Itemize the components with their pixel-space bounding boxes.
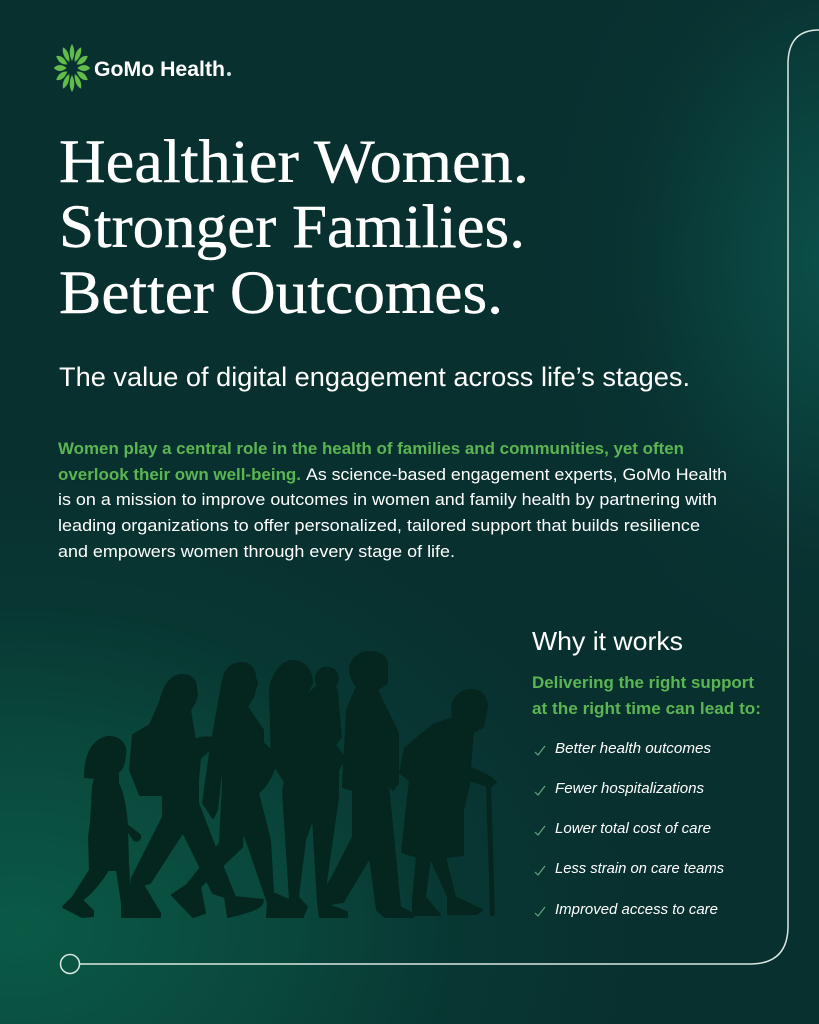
checklist: Better health outcomes [555, 741, 711, 757]
intro paragraph [58, 439, 727, 561]
intro paragraph: leading organizations to offer personalized, tailored support that builds resilience [58, 516, 700, 535]
green lead-in: Delivering the right support [532, 673, 754, 692]
intro paragraph: is on a mission to improve outcomes in women and family health by partnering with [58, 490, 717, 509]
subtitle: The value of digital engagement across life’s stages. [59, 362, 690, 392]
heading: Why it works [532, 626, 683, 656]
title [59, 129, 529, 327]
silhouette: child [63, 737, 160, 917]
intro paragraph: As science-based engagement experts, GoMo Health [306, 465, 727, 484]
silhouette: pregnant woman [172, 663, 305, 917]
checklist: Improved access to care [555, 902, 718, 918]
silhouette: walking cane [487, 783, 494, 915]
logo: GoMo Health [54, 44, 231, 92]
green lead-in [532, 673, 761, 718]
checklist [535, 741, 724, 918]
intro paragraph: and empowers women through every stage of life. [58, 542, 455, 561]
silhouette: elder woman [400, 690, 496, 915]
silhouette: mother holding baby [270, 661, 347, 917]
icon: green leaf burst [54, 44, 90, 92]
intro paragraph: overlook their own well-being. [58, 465, 301, 484]
title: Healthier Women. [59, 129, 529, 196]
title: Better Outcomes. [59, 260, 503, 327]
silhouette: teen with backpack [122, 675, 263, 917]
silhouettes: women across life stages [63, 652, 496, 917]
intro paragraph: Women play a central role in the health of families and communities, yet often [58, 439, 684, 458]
panel: why it works [532, 626, 761, 918]
green lead-in: at the right time can lead to: [532, 699, 761, 718]
title: Stronger Families. [59, 194, 525, 261]
silhouette: adult woman [318, 652, 413, 917]
logo wordmark: GoMo Health [94, 58, 225, 81]
checklist: Less strain on care teams [555, 861, 724, 877]
logo registered dot [227, 72, 231, 76]
checklist: Fewer hospitalizations [555, 781, 704, 797]
checklist: Lower total cost of care [555, 821, 711, 837]
